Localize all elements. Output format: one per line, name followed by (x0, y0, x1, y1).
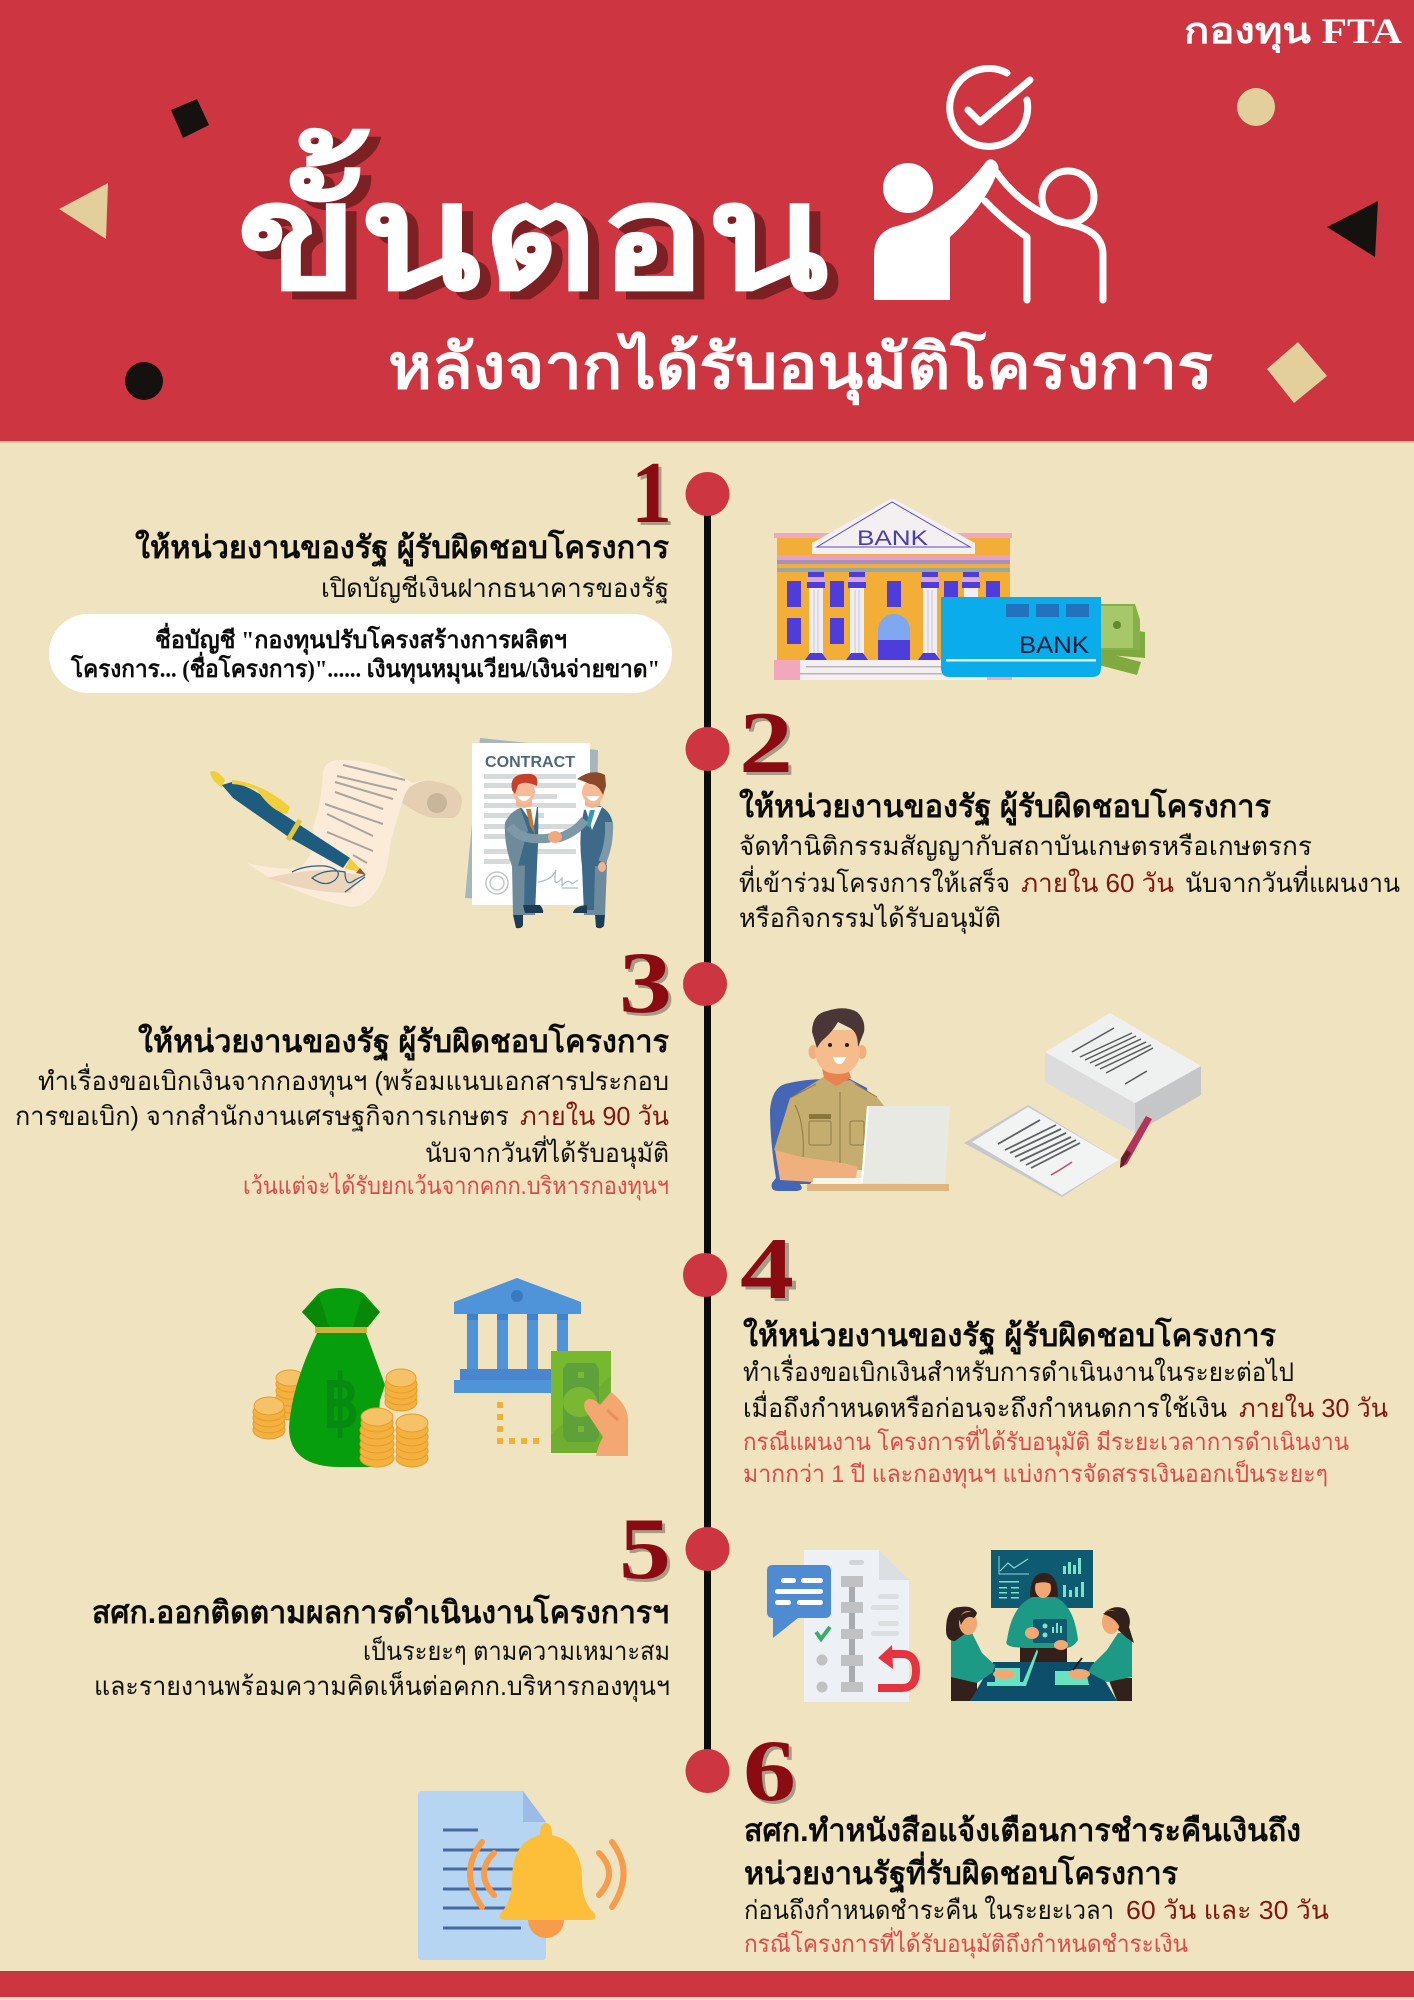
number 6: 6 (743, 1723, 796, 1820)
timeline dot 4 (683, 1253, 727, 1297)
brand label: FTA fund: กองทุน FTA (1184, 11, 1402, 54)
left man (505, 774, 550, 928)
description: การขอเบิก) จากสำนักงานเศรษฐกิจการเกษตร (15, 1101, 509, 1132)
number 2: 2 (739, 695, 793, 792)
description: ก่อนถึงกำหนดชำระคืน ในระยะเวลา (744, 1895, 1114, 1925)
step 4 (253, 1221, 1388, 1489)
description: ภายใน 30 วัน (1239, 1393, 1388, 1423)
illustration: team meeting (946, 1550, 1134, 1701)
header banner (0, 0, 1414, 443)
description: ทำเรื่องขอเบิกเงินสำหรับการดำเนินงานในระยะต่อไป (743, 1354, 1294, 1387)
timeline dot 1 (686, 472, 730, 516)
decoration: beige diamond (1267, 342, 1327, 403)
subtitle: หลังจากได้รับอนุมัติโครงการ (388, 330, 1213, 405)
number 3: 3 (619, 935, 672, 1032)
description (744, 1895, 1329, 1925)
description: หรือกิจกรรมได้รับอนุมัติ (739, 903, 1001, 934)
number 4: 4 (740, 1221, 794, 1318)
description: เปิดบัญชีเงินฝากธนาคารของรัฐ (321, 573, 669, 604)
illustration: signing pen on scroll (210, 760, 462, 907)
decoration: black triangle (1327, 201, 1378, 257)
illustration: government officer at laptop (770, 1008, 950, 1191)
main title with drop shadow: ขั้นตอน (247, 135, 840, 330)
step 2 (210, 695, 1400, 934)
heading: สศก.ออกติดตามผลการดำเนินงานโครงการฯ (92, 1594, 669, 1630)
illustration: bank and bank book: BANK (857, 527, 928, 550)
number 4: 4 (744, 1224, 798, 1321)
illustration: contract and handshake (465, 738, 613, 928)
step 3 (15, 935, 1201, 1201)
condition note: กรณีโครงการที่ได้รับอนุมัติถึงกำหนดชำระเงิน (744, 1927, 1188, 1959)
description: นับจากวันที่แผนงาน (1185, 865, 1400, 898)
bottom bar (0, 1971, 1414, 1997)
illustration: money bag and coins (253, 1288, 428, 1467)
description: เป็นระยะๆ ตามความเหมาะสม (363, 1635, 670, 1666)
step 1 (49, 445, 1145, 693)
exception note: เว้นแต่จะได้รับยกเว้นจากคกก.บริหารกองทุนฯ (243, 1172, 669, 1201)
number 2: 2 (742, 698, 796, 795)
timeline dot 5 (686, 1527, 730, 1571)
number 6: 6 (746, 1726, 799, 1823)
heading: ให้หน่วยงานของรัฐ ผู้รับผิดชอบโครงการ (138, 1023, 669, 1062)
number 3: 3 (622, 938, 675, 1035)
number 1: 1 (631, 445, 672, 542)
timeline dot 3 (683, 962, 727, 1006)
description: เมื่อถึงกำหนดหรือก่อนจะถึงกำหนดการใช้เงิน (743, 1390, 1227, 1423)
description (743, 1354, 1388, 1423)
description (739, 831, 1400, 934)
illustration: bank and bank book: BANK (1019, 632, 1089, 659)
number 5: 5 (619, 1501, 671, 1598)
description: ทำเรื่องขอเบิกเงินจากกองทุนฯ (พร้อมแนบเอกสารประกอบ (38, 1063, 669, 1097)
main title with drop shadow (236, 127, 840, 330)
decoration: black dot (125, 362, 163, 400)
heading: ให้หน่วยงานของรัฐ ผู้รับผิดชอบโครงการ (135, 529, 669, 568)
description: ภายใน 60 วัน (1021, 868, 1174, 898)
timeline dot 2 (686, 727, 730, 771)
heading: ให้หน่วยงานของรัฐ ผู้รับผิดชอบโครงการ (743, 1317, 1276, 1356)
condition note: กรณีแผนงาน โครงการที่ได้รับอนุมัติ มีระยะเวลาการดำเนินงาน (743, 1425, 1349, 1457)
number 5: 5 (622, 1504, 674, 1601)
description: 60 วัน และ 30 วัน (1126, 1895, 1329, 1925)
description: และรายงานพร้อมความคิดเห็นต่อคกก.บริหารกองทุนฯ (94, 1670, 670, 1702)
heading (744, 1813, 1301, 1894)
step 5 (92, 1501, 1134, 1702)
description (15, 1063, 669, 1169)
illustration: bank and bank book (774, 498, 1145, 680)
number 1: 1 (634, 448, 675, 545)
icon: people with raised hands and check mark (874, 68, 1103, 300)
description: นับจากวันที่ได้รับอนุมัติ (425, 1135, 669, 1169)
main title with drop shadow: ขั้นตอน (236, 127, 829, 322)
condition note: มากกว่า 1 ปี และกองทุนฯ แบ่งการจัดสรรเงินออกเป็นระยะๆ (743, 1459, 1328, 1489)
decoration: beige dot (1237, 88, 1275, 126)
decoration: black diamond (171, 99, 209, 138)
account name pill (49, 614, 672, 693)
illustration: money bag and coins: ฿ (323, 1363, 359, 1443)
condition note (743, 1425, 1349, 1489)
account name pill: ชื่อบัญชี "กองทุนปรับโครงสร้างการผลิตฯ (155, 622, 567, 656)
illustration: review document with speech bubble (767, 1550, 916, 1702)
decoration: beige triangle (59, 183, 108, 239)
timeline dot 6 (686, 1749, 730, 1793)
step 6 (418, 1723, 1329, 1960)
illustration: paper stack, signed document and pen (964, 1013, 1201, 1197)
description (94, 1635, 670, 1702)
heading: สศก.ทำหนังสือแจ้งเตือนการชำระคืนเงินถึง (744, 1813, 1301, 1848)
heading: หน่วยงานรัฐที่รับผิดชอบโครงการ (744, 1851, 1178, 1894)
account name pill: โครงการ... (ชื่อโครงการ)"...... เงินทุนหมุนเวียน/เงินจ่ายขาด" (70, 651, 660, 685)
timeline spine (704, 494, 711, 1771)
right man (558, 772, 613, 928)
heading: ให้หน่วยงานของรัฐ ผู้รับผิดชอบโครงการ (739, 788, 1271, 827)
illustration: notice document and ringing bell (418, 1791, 624, 1960)
illustration: bank building and banknote in hand (454, 1278, 628, 1456)
description: จัดทำนิติกรรมสัญญากับสถาบันเกษตรหรือเกษตรกร (739, 831, 1312, 861)
illustration: contract and handshake: CONTRACT (485, 754, 575, 771)
description: ภายใน 90 วัน (520, 1101, 669, 1131)
description: ที่เข้าร่วมโครงการให้เสร็จ (739, 865, 1010, 898)
